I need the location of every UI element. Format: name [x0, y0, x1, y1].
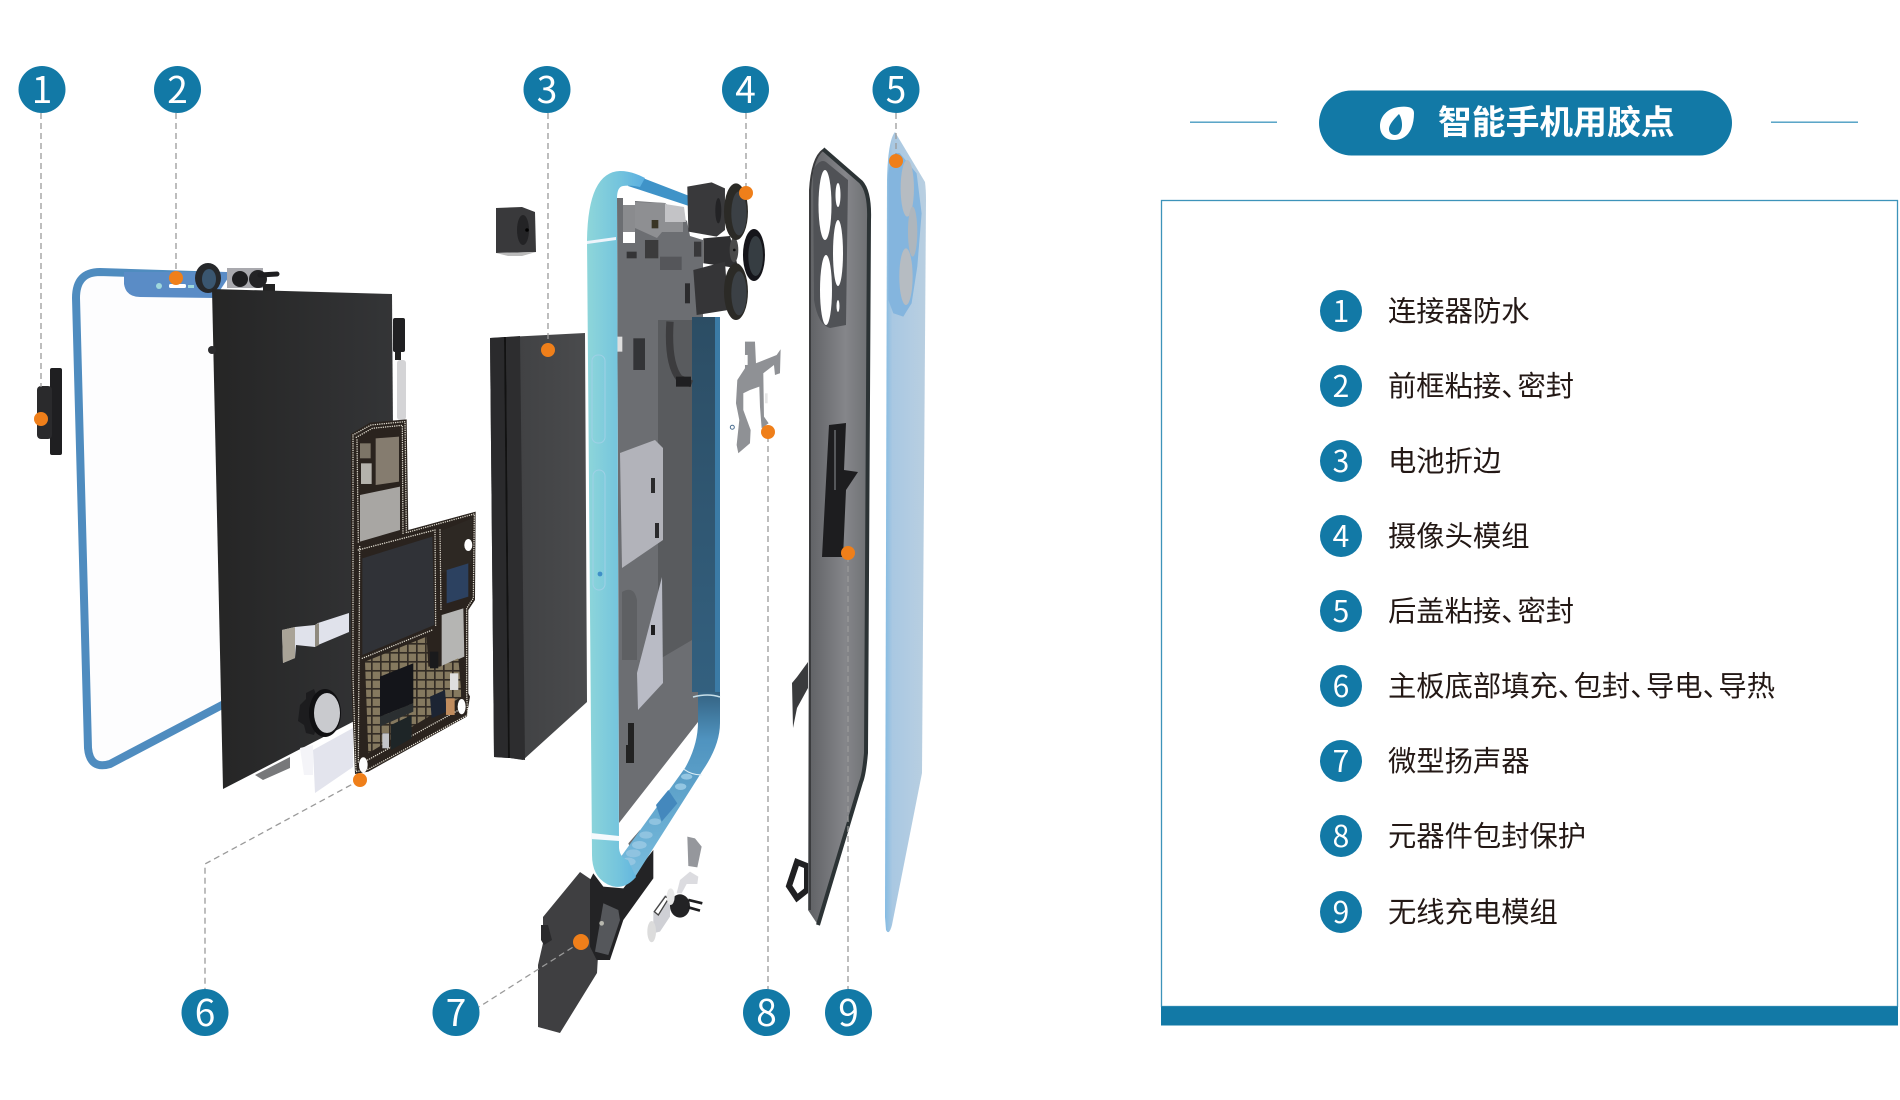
title decorative lines and pill heading — [1190, 90, 1858, 156]
legend item 7: 微型扬声器 — [1388, 745, 1530, 777]
marker 8: 8 — [756, 983, 777, 1037]
part: back glass — [885, 132, 926, 932]
part: flex cable — [282, 613, 349, 663]
legend item 1: 1 — [1333, 287, 1349, 331]
part: vibration motor — [298, 689, 341, 737]
marker 2: 2 — [167, 60, 188, 114]
legend item 6 — [1320, 662, 1775, 707]
legend item 7: 7 — [1333, 737, 1349, 781]
top arch — [628, 175, 692, 207]
icon: glue drop — [1380, 107, 1414, 140]
lower translucent band — [605, 690, 720, 887]
part: rear cover and wireless charging module — [789, 149, 870, 925]
legend item 6: 主板底部填充、包封、导电、导热 — [1388, 670, 1775, 702]
marker 6: 6 — [195, 983, 215, 1037]
marker 9 — [825, 983, 872, 1037]
marker 7: 7 — [446, 983, 466, 1037]
marker 8 — [743, 983, 790, 1037]
legend item 8 — [1320, 812, 1586, 857]
legend item 3: 电池折边 — [1388, 445, 1501, 477]
legend item 9: 9 — [1333, 888, 1349, 932]
marker 5 — [872, 60, 920, 114]
grey inner chassis — [617, 198, 703, 823]
part: speaker connector and sim tray — [255, 728, 353, 793]
legend item 5: 5 — [1333, 587, 1349, 631]
part: connector — [37, 368, 62, 455]
legend item 4: 摄像头模组 — [1388, 520, 1530, 552]
marker 6 — [182, 983, 228, 1037]
orange glue points — [34, 154, 903, 950]
marker 4: 4 — [735, 60, 756, 114]
legend item 7 — [1320, 737, 1530, 782]
legend item 8: 8 — [1333, 812, 1349, 856]
legend item 8: 元器件包封保护 — [1388, 820, 1586, 852]
marker 3 — [524, 60, 570, 114]
number markers on diagram — [18, 60, 920, 1037]
title: 智能手机用胶点 — [1438, 104, 1675, 142]
legend item 9 — [1320, 888, 1558, 933]
legend item 4 — [1320, 512, 1530, 557]
legend item 1 — [1320, 287, 1530, 332]
marker 5: 5 — [886, 60, 906, 114]
legend item 2: 前框粘接、密封 — [1388, 370, 1574, 402]
legend items — [1320, 287, 1775, 933]
legend panel — [1161, 200, 1898, 1026]
left cyan rail — [587, 171, 645, 887]
marker 9: 9 — [838, 983, 859, 1037]
part: front camera and earpiece cluster — [195, 263, 277, 293]
legend item 3 — [1320, 437, 1501, 482]
part: loose small components — [647, 837, 702, 942]
marker 7 — [432, 983, 480, 1037]
legend item 5: 后盖粘接、密封 — [1388, 595, 1574, 627]
marker 3: 3 — [537, 60, 557, 114]
legend item 2 — [1320, 362, 1574, 407]
legend item 3: 3 — [1333, 437, 1349, 481]
part: micro speaker — [538, 872, 602, 1033]
part: middle frame with internals — [587, 171, 720, 887]
part: camera bracket — [730, 342, 781, 453]
legend item 5 — [1320, 587, 1574, 632]
part: bottom connector assembly — [590, 830, 653, 960]
part: display panel — [208, 289, 406, 789]
part: battery — [490, 333, 587, 760]
marker 4 — [722, 60, 769, 114]
marker 1: 1 — [32, 60, 52, 114]
legend item 2: 2 — [1333, 362, 1349, 406]
leader lines — [41, 113, 896, 1007]
legend item 4: 4 — [1333, 512, 1349, 556]
marker 1 — [18, 60, 66, 114]
part: small front camera cube — [496, 207, 536, 256]
part: rear camera modules — [687, 182, 765, 320]
marker 2 — [154, 60, 201, 114]
legend item 1: 连接器防水 — [1388, 295, 1530, 327]
metal shields — [620, 440, 663, 568]
part: front glass frame — [76, 272, 232, 765]
legend item 9: 无线充电模组 — [1388, 896, 1558, 928]
part: main circuit board — [351, 419, 476, 774]
legend item 6: 6 — [1333, 662, 1349, 706]
